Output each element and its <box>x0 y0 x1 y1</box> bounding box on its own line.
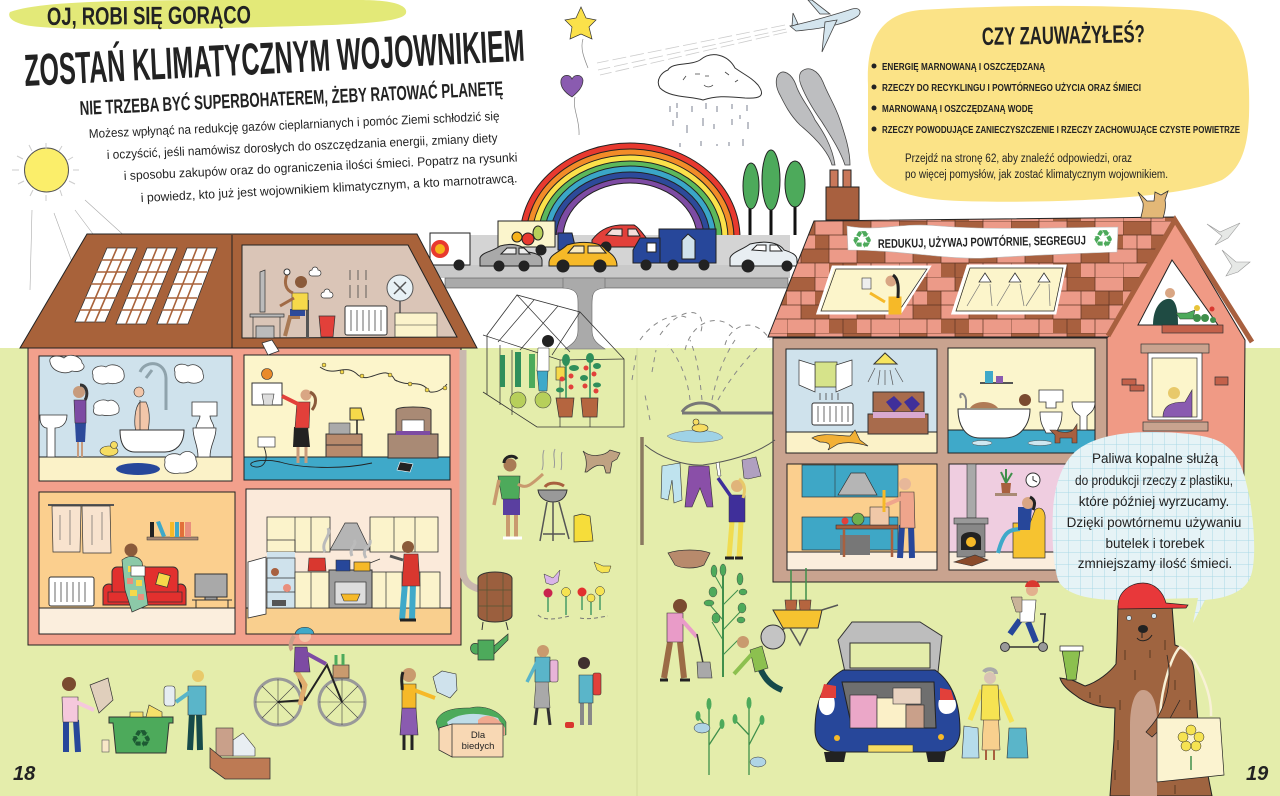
white car <box>730 242 797 272</box>
butterflies and flower bed <box>538 562 611 619</box>
yellow car <box>549 242 617 272</box>
recycling banner <box>847 225 1118 258</box>
did you notice panel: RZECZY DO RECYKLINGU I POWTÓRNEGO UŻYCIA ORAZ ŚMIECI <box>882 81 1141 94</box>
right house <box>768 170 1252 582</box>
white doves <box>1207 223 1250 276</box>
recycling banner: ♻ <box>851 226 873 254</box>
speech bubble: Dzięki powtórnemu używaniu <box>1067 515 1241 530</box>
roof window: lamps <box>953 266 1065 313</box>
roof <box>20 234 477 348</box>
roof window: woman at switch <box>818 267 929 313</box>
bathroom with overflowing tub <box>948 348 1095 453</box>
speech bubble: zmniejszamy ilość śmieci. <box>1078 556 1232 571</box>
walls <box>28 348 461 645</box>
did you notice panel: ENERGIĘ MARNOWANĄ I OSZCZĘDZANĄ <box>882 61 1045 73</box>
recycling bin <box>102 705 173 753</box>
wheelbarrow with seedlings <box>761 568 838 649</box>
speech bubble: które później wyrzucamy. <box>1079 494 1229 509</box>
rain barrel <box>478 572 512 630</box>
speech bubble: butelek i torebek <box>1105 536 1205 551</box>
bathroom <box>39 355 232 481</box>
did you notice panel: Przejdź na stronę 62, aby znaleźć odpowiedzi, oraz <box>905 153 1132 165</box>
intro text block: i powiedz, kto już jest wojownikiem klimatycznym, a kto marnotrawcą. <box>140 171 518 205</box>
recycling bin: ♻ <box>130 725 152 753</box>
children with backpacks <box>527 645 601 728</box>
speech bubble: do produkcji rzeczy z plastiku, <box>1075 473 1233 488</box>
intro text block <box>89 109 518 205</box>
gable window with woman <box>1122 344 1228 431</box>
grey car <box>480 244 542 271</box>
did you notice panel <box>868 6 1249 202</box>
laundry basket <box>668 550 710 568</box>
charity clothes box <box>436 707 506 757</box>
subtitle: NIE TRZEBA BYĆ SUPERBOHATEREM, ŻEBY RATOWAĆ PLANETĘ <box>79 76 504 120</box>
person with bottle <box>164 670 206 750</box>
solar panels <box>75 248 217 324</box>
intro text block: Możesz wpłynąć na redukcję gazów cieplarnianych i pomóc Ziemi schłodzić się <box>89 109 500 141</box>
recycling banner: ♻ <box>1092 225 1114 253</box>
wall body <box>773 338 1107 582</box>
woman hanging washing <box>718 478 745 558</box>
cars and trucks in a traffic jam <box>430 221 797 272</box>
kitchen <box>246 489 451 634</box>
motorway bridge <box>435 235 790 349</box>
drain pipe <box>463 350 482 590</box>
young tree <box>704 564 747 677</box>
greenhouse <box>483 295 624 427</box>
kitchen <box>787 464 937 570</box>
speech bubble: Paliwa kopalne służą <box>1092 451 1219 466</box>
did you notice panel: MARNOWANĄ I OSZCZĘDZANĄ WODĘ <box>882 103 1033 115</box>
charity clothes box: Dla <box>471 730 486 741</box>
attic room <box>242 245 457 338</box>
phone on eave <box>262 340 279 355</box>
did you notice panel: CZY ZAUWAŻYŁEŚ? <box>982 18 1145 51</box>
rain cloud <box>658 55 762 147</box>
intro text block: i oczyścić, jeśli namówisz dorosłych do oszczędzania energii, zmiany diety <box>107 131 498 162</box>
elderly woman with shopping bags <box>962 669 1028 760</box>
bedroom <box>786 349 937 453</box>
balloon star and heart <box>561 7 596 135</box>
chimney <box>826 170 859 220</box>
cardboard recycling box <box>210 728 270 779</box>
cyclist <box>255 627 365 725</box>
attic window with gardener <box>1138 260 1223 333</box>
intro text block: i sposobu zakupów oraz do ograniczenia ilości śmieci. Popatrz na rysunki <box>123 150 518 183</box>
rainbow <box>520 143 740 238</box>
watering can <box>470 634 508 660</box>
living room <box>39 492 235 634</box>
page number 18: 18 <box>13 763 36 785</box>
cat on roof <box>1138 191 1168 218</box>
truck with sun logo <box>430 233 470 270</box>
brick roof <box>768 217 1175 337</box>
chimney smoke <box>776 69 850 165</box>
header ribbon: OJ, ROBI SIĘ GORĄCO <box>47 1 251 31</box>
fruit truck <box>498 221 576 255</box>
yellow shopping bag <box>574 514 593 542</box>
man at barbecue <box>494 456 543 538</box>
brown dog <box>583 450 620 473</box>
bedroom <box>244 355 450 480</box>
speech bubble <box>1053 432 1254 623</box>
blue car with open boot and shopping <box>815 622 960 762</box>
gable trim <box>1108 220 1252 342</box>
did you notice panel: po więcej pomysłów, jak zostać klimatycznym wojownikiem. <box>905 169 1168 181</box>
title: ZOSTAŃ KLIMATYCZNYM WOJOWNIKIEM <box>23 20 526 96</box>
red car <box>592 225 648 252</box>
header ribbon <box>9 0 406 31</box>
barbecue grill <box>538 449 569 541</box>
airplane and contrails <box>597 0 860 75</box>
garden sprinkler and pond <box>632 312 775 442</box>
living room with stove <box>949 464 1090 570</box>
child on scooter <box>1000 580 1048 652</box>
kneeling man planting <box>734 636 782 690</box>
saplings with birds <box>694 697 766 775</box>
icon: sun with rays <box>12 143 140 290</box>
person with cardboard <box>62 677 113 752</box>
trees <box>743 150 805 235</box>
gable wall <box>1107 222 1245 582</box>
charity clothes box: biedych <box>462 741 494 752</box>
left house <box>20 234 482 645</box>
roof divider <box>231 235 233 348</box>
page number 19: 19 <box>1246 763 1269 785</box>
washing line with clothes <box>642 437 775 545</box>
recycling banner: REDUKUJ, UŻYWAJ POWTÓRNIE, SEGREGUJ <box>878 232 1086 251</box>
woman donating clothes <box>400 668 457 750</box>
woman digging with spade <box>660 599 712 680</box>
bear with reusable cup and bag <box>1060 583 1224 796</box>
blue milk truck <box>633 229 716 270</box>
